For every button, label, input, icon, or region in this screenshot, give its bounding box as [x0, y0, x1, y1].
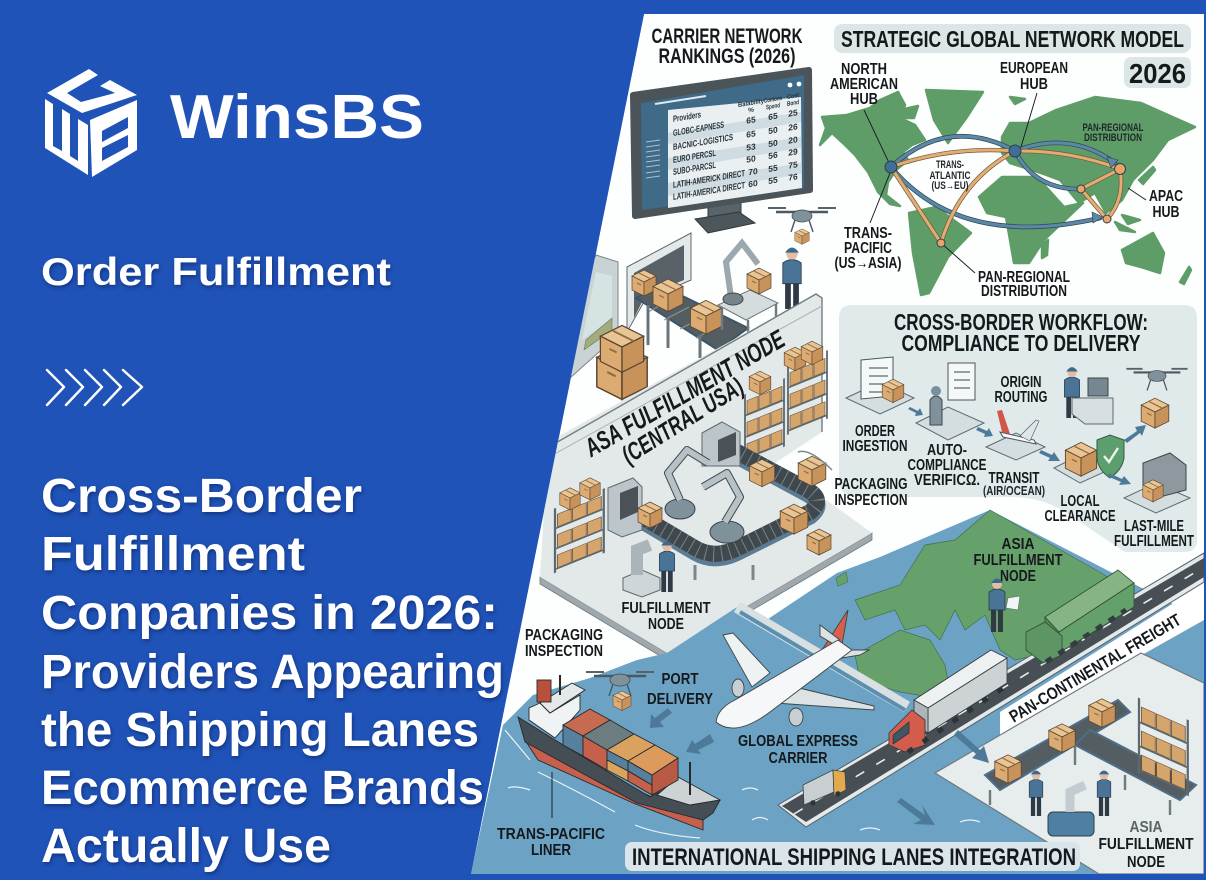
map labels: TRANS- [844, 225, 892, 242]
monitor with rankings table: 50 [768, 138, 778, 149]
monitor with rankings table: LATIH-AMERICK DIRECT [673, 168, 745, 190]
label: fulfillment node: FULFILLMENT [622, 600, 711, 617]
monitor with rankings table: EURO PERCSL [673, 148, 716, 165]
wall label: node name: (CENTRAL USA) [617, 373, 749, 470]
monitor with rankings table: 75 [788, 159, 798, 171]
conveyor loop with robots [608, 422, 832, 597]
road [778, 553, 1204, 827]
map labels: HUB [1020, 76, 1048, 93]
stacked boxes [597, 325, 647, 399]
monitor with rankings table: Spond [766, 102, 780, 111]
label: fulfillment node: NODE [648, 616, 684, 633]
robot arms [665, 499, 695, 519]
step 6: last-mile machine [1143, 453, 1186, 502]
map labels: HUB [850, 91, 878, 108]
workflow labels: INGESTION [842, 438, 908, 455]
monitor with rankings table: 65 [746, 114, 756, 126]
monitor with rankings table: 55 [768, 175, 778, 186]
label: asia fulfillment node (upper): FULFILLMENT [974, 552, 1063, 569]
workflow heading: COMPLIANCE TO DELIVERY [902, 330, 1140, 356]
monitor with rankings table: 29 [788, 146, 798, 158]
title: Actually Use [41, 820, 331, 873]
label: asia fulfillment node (upper): NODE [1000, 568, 1036, 585]
title: Conpanies in 2026: [41, 587, 498, 640]
bottom labels [497, 627, 858, 859]
heading: carrier network rankings [652, 25, 802, 68]
monitor with rankings table: 25 [788, 107, 798, 119]
monitor with rankings table: Bond [787, 99, 799, 108]
icon: workflow drone and parcel [1126, 369, 1188, 428]
monitor with rankings table: 26 [788, 121, 798, 133]
title: Fulfillment [41, 528, 305, 581]
workflow labels: CLEARANCE [1044, 508, 1116, 525]
monitor with rankings table: 60 [748, 178, 758, 189]
panel: cross-border workflow [834, 305, 1197, 552]
waves [505, 730, 980, 838]
map labels: EUROPEAN [1000, 60, 1068, 77]
icon: chevron arrows [47, 370, 142, 405]
monitor with rankings table: 20 [788, 134, 798, 146]
category heading: Order Fulfillment [41, 251, 391, 294]
workflow labels [834, 374, 1194, 550]
workflow labels: COMPLIANCE [908, 457, 987, 474]
lower fulfillment floor and wall [540, 294, 872, 660]
logo: WinsBS cube mark [45, 69, 137, 177]
monitor with rankings table: 50 [746, 153, 756, 165]
workflow labels: AUTO- [927, 442, 967, 459]
wall label: node name: ASA FULFILLMENT NODE [579, 323, 790, 463]
bottom labels: PACKAGING [525, 627, 603, 644]
workflow labels: (AIR/OCEAN) [983, 483, 1045, 498]
workflow labels: LOCAL [1060, 493, 1100, 510]
bottom labels: PORT [662, 671, 699, 688]
step 5: local clearance box and shield [1065, 435, 1124, 478]
monitor with rankings table: 76 [788, 171, 798, 183]
bottom labels: GLOBAL EXPRESS [738, 733, 858, 750]
title [41, 470, 504, 873]
monitor with rankings table: 70 [748, 166, 758, 177]
label: asia fulfillment node (lower): FULFILLMENT [1098, 836, 1194, 853]
leader line: liner [551, 772, 553, 818]
step 3: origin routing worker and desk [1064, 367, 1113, 424]
route arcs [891, 136, 1121, 243]
label: asia fulfillment node (lower) [1098, 819, 1194, 871]
monitor with rankings table: 53 [746, 141, 756, 153]
monitor with rankings table: 65 [746, 128, 756, 140]
map labels: HUB [1152, 204, 1180, 221]
label: asia fulfillment node (lower): NODE [1127, 854, 1165, 871]
monitor with rankings table [633, 70, 810, 233]
airplane [716, 610, 874, 728]
map labels: ATLANTIC [930, 170, 971, 182]
label: asia fulfillment node (upper) [974, 536, 1063, 585]
heading: carrier network rankings: CARRIER NETWORK [652, 25, 802, 48]
monitor with rankings table: 55 [768, 163, 778, 174]
workflow labels: ORDER [855, 423, 895, 440]
step 2: compliance icon [930, 363, 975, 425]
map labels: (US→ASIA) [834, 255, 902, 272]
step platforms [846, 382, 1190, 513]
bottom-right warehouse platform [935, 584, 1204, 874]
monitor with rankings table: 50 [768, 125, 778, 136]
world map [820, 90, 1195, 295]
map labels: DISTRIBUTION [981, 283, 1067, 300]
workflow labels: ROUTING [994, 389, 1048, 406]
icon: person with map [989, 578, 1020, 632]
bottom labels: TRANS-PACIFIC [497, 826, 605, 843]
monitor with rankings table: SUBO-PARCSL [673, 160, 716, 177]
step 1: order ingestion icon [861, 357, 904, 403]
map labels: PAN-REGIONAL [1082, 122, 1144, 134]
hubs [885, 145, 1126, 247]
map labels: DISTRIBUTION [1084, 132, 1142, 144]
workflow arrows [908, 407, 1146, 485]
label: asia fulfillment node (lower): ASIA [1130, 819, 1163, 836]
monitor with rankings table: % [748, 106, 754, 114]
map labels: (US→EU) [932, 180, 969, 192]
icon: warehouse worker [783, 247, 801, 309]
upper fulfillment bay [560, 233, 778, 378]
monitor with rankings table: 65 [768, 111, 778, 122]
workflow labels: LAST-MILE [1124, 518, 1184, 535]
scanner gates [702, 422, 740, 466]
monitor with rankings table: Balability [738, 98, 764, 109]
map labels: TRANS- [936, 159, 964, 171]
bottom labels: LINER [531, 842, 571, 859]
map labels: APAC [1149, 188, 1183, 205]
workflow labels: ORIGIN [1000, 374, 1042, 391]
year badge: 2026 [1129, 58, 1186, 89]
map labels: PACIFIC [844, 240, 892, 257]
workflow labels: TRANSIT [988, 470, 1040, 487]
title: the Shipping Lanes [41, 704, 479, 757]
leader lines [864, 93, 1146, 273]
label: fulfillment node [622, 602, 710, 629]
icon: port drone [586, 672, 654, 710]
heading bar: international shipping lanes: INTERNATIONAL SHIPPING LANES INTEGRATION [632, 844, 1076, 871]
green freight truck [1026, 570, 1134, 663]
step 4: transit plane [997, 410, 1039, 444]
heading: carrier network rankings: RANKINGS (2026) [658, 45, 796, 68]
icon: drone with parcel [768, 208, 836, 244]
panel: illustration [471, 14, 1204, 874]
monitor with rankings table: Contons [764, 95, 782, 105]
monitor with rankings table: Providers [673, 109, 701, 124]
map plate [737, 510, 1130, 710]
title: Cross-Border [41, 470, 362, 523]
brand name: WinsBS [170, 83, 424, 152]
shelving units [555, 341, 827, 573]
title: Providers Appearing [41, 646, 504, 699]
workflow labels: VERIFICΩ. [914, 472, 980, 489]
red delivery truck [889, 650, 1007, 752]
inspection robot [623, 570, 660, 597]
workflow labels: PACKAGING [834, 476, 908, 493]
workflow heading [894, 314, 1146, 351]
water arrows [650, 708, 989, 825]
bottom labels: DELIVERY [647, 691, 713, 708]
bottom labels: INSPECTION [525, 643, 603, 660]
monitor with rankings table: BACNIC-LOGISTICS [673, 132, 733, 152]
title: Ecommerce Brands [41, 762, 484, 815]
map labels [830, 60, 1183, 300]
water [471, 510, 1204, 874]
monitor with rankings table: 56 [768, 150, 778, 161]
label: asia fulfillment node (upper): ASIA [1002, 536, 1035, 553]
icon: floor worker [659, 541, 675, 592]
monitor with rankings table: GLOBC-EAPNESS [673, 120, 724, 138]
cargo ship [518, 675, 720, 830]
small delivery van [803, 770, 846, 806]
map labels: NORTH [841, 61, 887, 78]
bottom labels: CARRIER [768, 750, 828, 767]
monitor with rankings table: Cost [787, 92, 800, 101]
monitor with rankings table: LATIH-AMERICA DIRECT [673, 180, 745, 202]
workflow labels: INSPECTION [834, 492, 908, 509]
map labels: AMERICAN [830, 76, 898, 93]
map labels: PAN-REGIONAL [978, 269, 1070, 286]
